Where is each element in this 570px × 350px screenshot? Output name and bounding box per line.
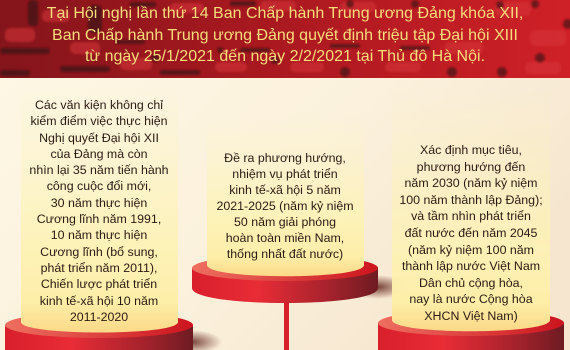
left column text: của Đảng mà còn [50, 147, 148, 161]
center column text: kinh tế-xã hội 5 năm [229, 183, 341, 197]
right column text: XHCN Việt Nam) [424, 309, 518, 323]
left podium [5, 123, 220, 350]
right column text: (năm kỷ niệm 100 năm [408, 243, 534, 257]
left column text: 10 năm thực hiện [51, 228, 147, 242]
right podium [378, 141, 564, 350]
left column text [29, 98, 169, 324]
left column text: 30 năm thực hiện [51, 196, 147, 210]
left column text: kiểm điểm việc thực hiện [30, 114, 168, 128]
center podium [192, 145, 392, 303]
left column text: 2011-2020 [70, 310, 128, 324]
right column text [399, 143, 543, 323]
right column text: đất nước đến năm 2045 [405, 226, 537, 240]
left column text: Chiến lược phát triển [41, 277, 157, 291]
left column text: Nghị quyết Đại hội XII [39, 131, 159, 145]
header text [47, 5, 523, 65]
left column text: phát triển năm 2011), [41, 261, 157, 275]
header text: Tại Hội nghị lần thứ 14 Ban Chấp hành Trung ương Đảng khóa XII, [47, 5, 523, 22]
right column text: và tầm nhìn phát triển [411, 209, 531, 223]
header text: Ban Chấp hành Trung ương Đảng quyết định triệu tập Đại hội XIII [52, 26, 518, 44]
right column text: phương hướng đến [417, 160, 525, 174]
left column text: Cương lĩnh năm 1991, [37, 212, 161, 226]
header banner photo [0, 0, 570, 78]
right column text: 100 năm thành lập Đảng); [399, 193, 543, 207]
left column text: kinh tế-xã hội 10 năm [40, 294, 158, 308]
right column text: thành lập nước Việt Nam [402, 259, 540, 273]
right column text: năm 2030 (năm kỷ niệm [405, 176, 537, 190]
left column text: Các văn kiện không chỉ [35, 98, 163, 112]
right column text: Xác định mục tiêu, [420, 143, 522, 157]
left column text: Cương lĩnh (bổ sung, [40, 245, 158, 259]
center column text [216, 151, 354, 261]
center column text: hoàn toàn miền Nam, [226, 231, 344, 245]
center column text: nhiệm vụ phát triển [232, 167, 338, 181]
center column text: 2021-2025 (năm kỷ niệm [216, 199, 354, 213]
center column text: thống nhất đất nước) [227, 247, 343, 261]
left column text: công cuộc đổi mới, [47, 179, 151, 193]
center column text: 50 năm giải phóng [234, 215, 336, 229]
header text: từ ngày 25/1/2021 đến ngày 2/2/2021 tại Thủ đô Hà Nội. [85, 48, 485, 65]
center column text: Đề ra phương hướng, [224, 151, 346, 165]
red vertical connector [284, 300, 288, 350]
left column text: nhìn lại 35 năm tiến hành [29, 163, 169, 177]
right column text: nay là nước Cộng hòa [409, 292, 533, 306]
right column text: Dân chủ cộng hòa, [419, 276, 523, 290]
